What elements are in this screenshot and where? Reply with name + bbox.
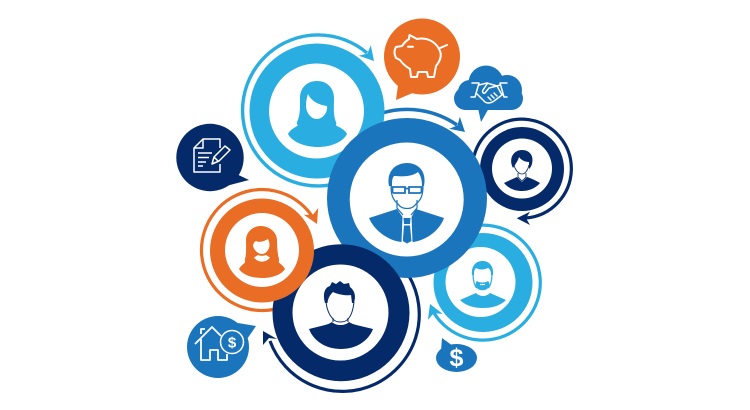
speech bubble: house and dollar	[187, 316, 256, 378]
arrow ring: navy man bottom	[263, 276, 419, 391]
person: main blue man with glasses and tie	[327, 118, 487, 278]
speech bubble: cloud with handshake	[454, 66, 523, 122]
arrow ring: light blue bearded man	[428, 225, 540, 340]
person: light blue bearded man	[434, 233, 532, 332]
arrow ring: orange woman	[201, 190, 318, 311]
arrow arc: main blue man	[382, 109, 465, 132]
speech bubble: orange piggy bank	[384, 18, 460, 100]
icon: document with pen	[194, 139, 230, 172]
person: orange woman	[210, 198, 314, 302]
speech bubble: dollar sign: $	[450, 344, 464, 372]
person: navy man bottom	[272, 244, 410, 381]
person: light blue woman	[250, 44, 384, 178]
icon: house	[195, 327, 227, 360]
speech bubble: dollar sign	[436, 338, 477, 372]
arrow ring: navy man right	[474, 119, 571, 225]
person: navy man right	[480, 127, 564, 211]
icon: handshake	[471, 83, 507, 103]
arrow ring: light blue woman	[243, 35, 374, 186]
speech bubble: navy document and pen	[176, 124, 249, 191]
icon: piggy bank	[394, 35, 447, 77]
icon: dollar coin: $	[228, 334, 237, 352]
